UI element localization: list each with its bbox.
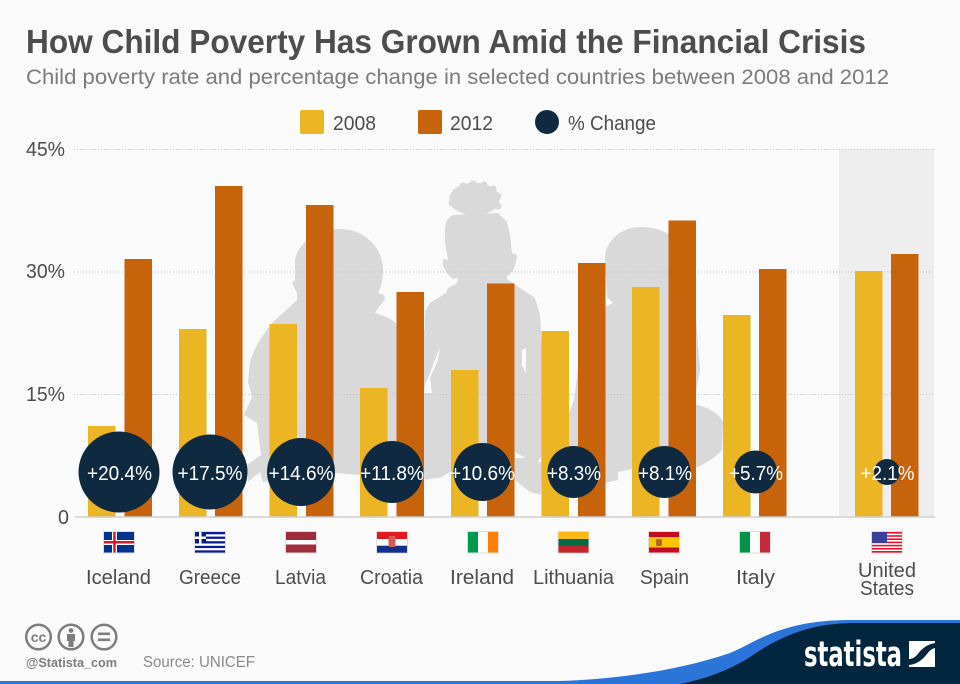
title: How Child Poverty Has Grown Amid the Financial Crisis	[26, 23, 866, 60]
x axis line	[75, 516, 935, 518]
country labels: Croatia	[360, 566, 424, 589]
country labels: Italy	[736, 566, 776, 589]
country labels	[86, 559, 916, 600]
silhouette: middle child	[425, 180, 545, 495]
grid lines	[74, 150, 934, 394]
flag: Croatia	[376, 532, 408, 553]
country labels: Lithuania	[533, 566, 615, 589]
bar chart: 2012	[124, 186, 918, 517]
legend: 2008	[333, 112, 376, 135]
legend	[300, 110, 656, 135]
country labels: United	[858, 559, 916, 582]
flag: Latvia	[286, 532, 316, 553]
country labels: Greece	[179, 566, 241, 589]
percent change labels: +11.8%	[360, 462, 424, 485]
flag: Iceland	[104, 532, 134, 553]
country labels: Ireland	[450, 566, 514, 589]
y axis labels: 15%	[26, 383, 65, 406]
bar chart: 2008	[88, 271, 882, 517]
children silhouettes	[244, 180, 723, 495]
country labels: States	[860, 577, 914, 600]
percent change labels: +2.1%	[860, 462, 914, 485]
icon: creative commons: cc	[31, 629, 46, 645]
y axis labels	[26, 138, 69, 529]
silhouette gaps	[424, 297, 613, 462]
percent change labels: +14.6%	[268, 462, 334, 485]
country labels: Iceland	[86, 566, 151, 589]
percent change labels: +5.7%	[729, 462, 783, 485]
y axis labels: 0	[58, 506, 69, 529]
percent change labels	[87, 462, 914, 485]
percent change labels: +17.5%	[178, 462, 242, 485]
country labels: Spain	[640, 566, 689, 589]
statista logo: statista	[804, 635, 902, 675]
percent change labels: +20.4%	[87, 462, 152, 485]
y axis labels: 30%	[26, 260, 65, 283]
footer wave	[0, 620, 960, 684]
panel: United States highlight	[839, 149, 934, 517]
flag: Spain	[648, 532, 680, 553]
y axis labels: 45%	[26, 138, 65, 161]
source: Source: UNICEF	[143, 654, 255, 671]
flag: Greece	[194, 532, 226, 553]
silhouette: right child	[569, 227, 723, 485]
country labels: Latvia	[275, 566, 327, 589]
silhouette: left child	[244, 229, 430, 482]
credit handle: @Statista_com	[26, 655, 117, 670]
flag: Italy	[740, 532, 770, 553]
percent change labels: +8.1%	[638, 462, 692, 485]
flag: Ireland	[468, 532, 498, 553]
flag: United States	[872, 532, 902, 553]
percent change labels: +10.6%	[450, 462, 515, 485]
flag: Lithuania	[558, 532, 589, 553]
icon: creative commons	[26, 625, 116, 649]
subtitle: Child poverty rate and percentage change in selected countries between 2008 and 2012	[26, 65, 889, 89]
percent change bubbles	[78, 432, 900, 512]
legend: % Change	[568, 112, 656, 135]
legend: 2012	[450, 112, 493, 135]
percent change labels: +8.3%	[547, 462, 601, 485]
